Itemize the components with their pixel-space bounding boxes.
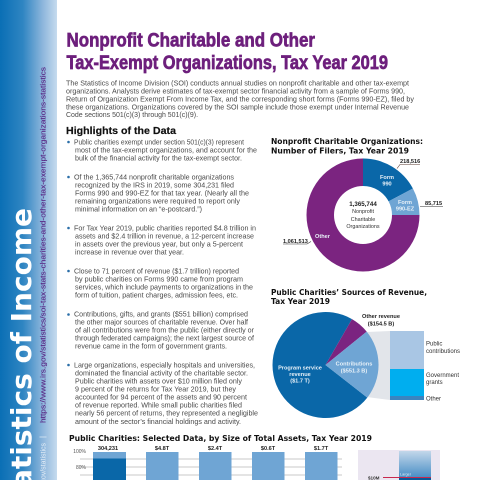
highlight bullet: assets and revenue: assets and $2.4 trillion in revenue, a 12-percent increase (75, 232, 254, 240)
pie label: other revenue: ($154.5 B) (368, 322, 394, 328)
heading: number of filers: Nonprofit Charitable Organizations: (271, 137, 423, 146)
highlight bullet: program services: services, which include payments to organizations in the (75, 282, 253, 292)
highlight bullet: large organizations: amount of the sector’s financial holdings and activity. (75, 417, 241, 426)
highlight bullet: assets and revenue: in assets over the previous year, but only a 5-percent (75, 240, 243, 248)
heading: number of filers: Number of Filers, Tax Year 2019 (271, 146, 409, 156)
pie label: program service revenue: ($1.7 T) (290, 378, 310, 384)
heading: sources of revenue (271, 288, 427, 306)
highlight bullet: large organizations: accounted for 94 percent of the assets and 90 percent (75, 392, 247, 402)
highlight bullet: large organizations: Public charities with assets over $10 million filed only (75, 376, 242, 386)
intro text: Return of Organization Exempt From Income Tax, and the corresponding short forms (Forms 990-EZ), filed by (66, 94, 414, 104)
callout: 218,516 (397, 159, 420, 168)
legend gradient bar (399, 451, 431, 477)
highlight bullet: public charities share: most of the tax-exempt organizations, and account for the (75, 146, 257, 154)
title: Tax-Exempt Organizations, Tax Year 2019 (66, 52, 388, 74)
stacked bar: contributions breakdown (390, 331, 424, 400)
bar: contributions (252, 452, 284, 480)
highlight bullet: filers: remaining organizations were required to report only (75, 196, 240, 206)
sidebar divider (40, 436, 46, 438)
highlight bullet: program services (67, 266, 253, 300)
stacked bar legend: contributions (426, 349, 460, 355)
connector between pie and stacked bar (367, 331, 390, 400)
bar totals (98, 446, 329, 452)
pie slice: program service revenue (273, 312, 367, 418)
pie label: program service revenue: revenue (289, 372, 311, 378)
donut label: form 990-EZ: Form (398, 200, 412, 206)
highlight bullet: assets and revenue (67, 224, 256, 256)
pie label: program service revenue (278, 366, 322, 384)
intro text: Code sections 501(c)(3) through 501(c)(9). (66, 110, 198, 119)
bar totals: $1.7T (314, 446, 329, 452)
bar totals: 304,231 (98, 446, 118, 452)
donut centre label: Charitable (351, 217, 375, 223)
stacked bar legend (426, 342, 460, 402)
asset size legend panel (358, 450, 440, 480)
title: Nonprofit Charitable and Other (66, 30, 315, 52)
donut slice: form 990-EZ (389, 188, 420, 215)
sidebar url: https://www.irs.gov/statistics/soi-tax-stats-charities-and-other-tax-exempt-organizations-statistics (38, 67, 48, 423)
intro text (66, 78, 414, 119)
pie slice: contributions (326, 332, 379, 398)
highlight bullet: large organizations (67, 360, 258, 426)
stacked bar legend: grants (426, 380, 443, 386)
stacked bar legend: Other (426, 396, 441, 402)
highlight bullet: filers (67, 172, 249, 214)
callout: 1,061,513: 1,061,513 (283, 239, 308, 245)
stacked bar legend: Public (426, 342, 442, 348)
legend threshold line (383, 476, 431, 478)
pie label: contributions (336, 362, 372, 374)
highlight bullet: program services: Close to 71 percent of revenue ($1.7 trillion) reported (74, 266, 239, 276)
pie slice: other revenue (326, 319, 367, 365)
donut centre label (346, 201, 380, 230)
axis labels: 100% (73, 449, 87, 455)
highlight bullet: assets and revenue: increase in revenue over that year. (75, 248, 184, 256)
intro text: these organizations. Organizations covered by the SOI sample include those exempt under Internal Revenue (66, 102, 409, 112)
pie chart: sources of revenue (273, 312, 460, 418)
bar totals: $0.6T (261, 446, 276, 452)
highlight bullet: filers: recognized by the IRS in 2019, some 304,231 filed (75, 180, 234, 190)
highlight bullet: contributions: Contributions, gifts, and grants ($551 billion) comprised (74, 310, 248, 318)
donut chart: number of filers (283, 158, 443, 272)
highlight bullet: public charities share: Public charities exempt under section 501(c)(3) represent (74, 138, 244, 146)
highlight bullet: contributions (67, 310, 255, 350)
gridlines (80, 459, 342, 475)
donut label: form 990-EZ: 990-EZ (396, 206, 415, 212)
highlight bullet: large organizations: nearly 56 percent of returns, they represented a negligible (75, 408, 258, 418)
bar chart: selected data by asset size (73, 446, 342, 480)
callout: 85,715: 85,715 (425, 201, 442, 207)
highlight bullet: large organizations: Large organizations, especially hospitals and universities, (74, 360, 255, 370)
donut label: form 990: 990 (382, 182, 392, 188)
pie label: contributions: ($551.3 B) (341, 368, 367, 374)
donut label: form 990 (380, 175, 394, 188)
highlight bullet: contributions: of all contributions were from the public (either directly or (75, 326, 255, 334)
bar: returns (93, 452, 126, 480)
highlight bullet: filers: minimal information on an “e-postcard.”) (75, 204, 202, 214)
highlight bullet: large organizations: dominated the financial activity of the charitable sector. (75, 368, 248, 378)
intro text: The Statistics of Income Division (SOI) conducts annual studies on nonprofit charitable and other tax-exempt (66, 78, 409, 88)
highlight bullet: contributions: through federated campaigns); the next largest source of (75, 334, 255, 342)
bar: program service revenue (305, 452, 338, 480)
pie label: other revenue: Other revenue (362, 314, 400, 320)
highlight bullet: contributions: revenue came in the form of government grants. (75, 342, 227, 350)
bar totals: $4.8T (155, 446, 170, 452)
heading: sources of revenue: Public Charities’ Sources of Revenue, (271, 288, 427, 297)
highlight bullet: program services: by public charities on Forms 990 came from program (75, 274, 243, 284)
highlight bullet: public charities share: bulk of the financial activity for the tax-exempt sector. (75, 154, 242, 162)
highlight bullet: contributions: the other major sources of charitable revenue. Over half (75, 318, 249, 326)
highlight bullet: assets and revenue: For Tax Year 2019, public charities reported $4.8 trillion in (74, 224, 256, 232)
heading: number of filers (271, 137, 423, 156)
pie label: program service revenue: Program service (278, 366, 322, 372)
stacked bar legend: Government (426, 373, 459, 379)
pie label: other revenue (362, 314, 400, 328)
donut label: form 990: Form (380, 175, 394, 181)
highlight bullet: filers: Of the 1,365,744 nonprofit charitable organizations (74, 172, 234, 182)
donut slice: form 990 (363, 158, 413, 201)
intro text: organizations. Analysts derive estimates of tax-exempt sector financial activity from a sample of Forms 990, (66, 86, 405, 96)
heading: sources of revenue: Tax Year 2019 (271, 297, 330, 306)
axis labels (73, 449, 87, 471)
donut centre label: Organizations (346, 224, 380, 230)
pie label: contributions: Contributions (336, 362, 372, 368)
donut label: other: Other (315, 234, 331, 240)
highlight bullet: public charities share (67, 138, 257, 162)
bar totals: $2.4T (208, 446, 223, 452)
axis labels: 80% (76, 465, 87, 471)
bar: revenue (199, 452, 232, 480)
donut centre label: 1,365,744 (349, 201, 377, 208)
legend size label: Larger (400, 472, 412, 476)
sidebar banner (0, 0, 57, 480)
donut label: form 990-EZ (396, 200, 415, 212)
donut slice: other (306, 158, 420, 272)
highlight bullet: program services: form of tuition, patient charges, admission fees, etc. (75, 290, 238, 300)
title (66, 30, 388, 74)
bar: assets (146, 452, 178, 480)
heading: selected data: Public Charities: Selected Data, by Size of Total Assets, Tax Year 2019 (69, 434, 372, 443)
donut centre label: Nonprofit (352, 209, 374, 215)
highlights heading: Highlights of the Data (66, 125, 176, 137)
highlight bullet: large organizations: of revenue reported. While small public charities filed (75, 400, 242, 410)
callout: 218,516: 218,516 (400, 159, 420, 165)
highlight bullet: large organizations: 9 percent of the returns for Tax Year 2019, but they (75, 384, 236, 394)
highlight bullet: filers: Forms 990 and 990-EZ for that tax year. (Nearly all the (75, 188, 249, 198)
